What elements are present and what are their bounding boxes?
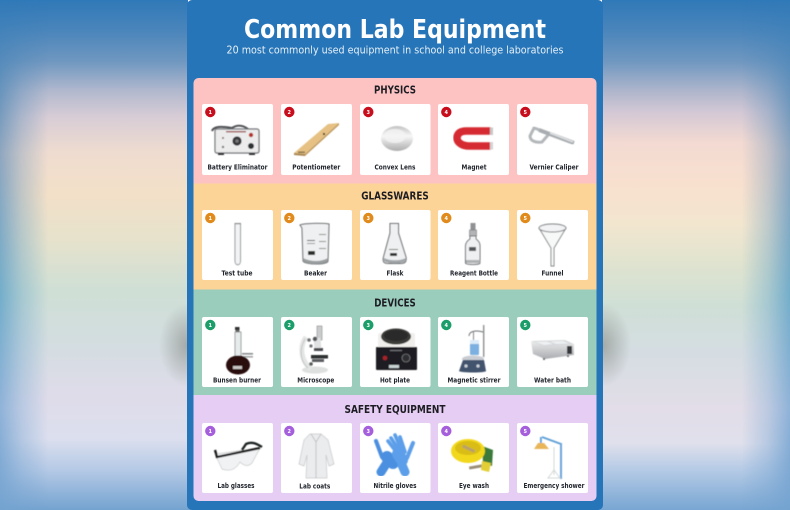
icon: convex lens [381, 126, 413, 151]
heading: devices: DEVICES [374, 296, 416, 310]
card: convex lens [360, 104, 430, 175]
icon: eye wash [451, 439, 493, 472]
card: microscope [281, 317, 352, 387]
content panel [194, 78, 596, 501]
badge 2: 2 [288, 110, 292, 116]
icon: lab coat [299, 434, 334, 478]
badge 2: 2 [288, 216, 292, 222]
icon: funnel [539, 224, 566, 266]
badge 1: 1 [209, 110, 213, 116]
card: reagent bottle [438, 210, 509, 280]
icon: vernier caliper [530, 128, 574, 143]
icon: magnet [457, 128, 493, 150]
label: Lab coats [299, 482, 330, 490]
icon: reagent bottle [466, 223, 480, 264]
label: Nitrile gloves [374, 481, 416, 490]
label: Battery Eliminator [208, 162, 268, 172]
card: hot plate [360, 317, 430, 387]
badge 4: 4 [445, 429, 449, 435]
badge 1: 1 [209, 429, 213, 435]
card: nitrile gloves [360, 423, 430, 493]
icon: bunsen burner [226, 327, 253, 374]
label: Emergency shower [524, 481, 585, 490]
badge 3: 3 [367, 429, 371, 435]
label: Water bath [534, 376, 571, 384]
heading: safety equipment: SAFETY EQUIPMENT [344, 403, 446, 416]
label: Convex Lens [374, 162, 416, 172]
label: Reagent Bottle [450, 268, 498, 278]
card: eye wash [438, 423, 509, 493]
card: funnel [517, 210, 588, 280]
card: battery eliminator [202, 104, 273, 175]
badge 2: 2 [288, 429, 292, 435]
label: Hot plate [380, 376, 410, 384]
icon: test tube [234, 223, 241, 265]
card: water bath [517, 317, 588, 387]
card: potentiometer [281, 104, 352, 175]
label: Magnetic stirrer [448, 376, 501, 384]
card: lab coats [281, 423, 352, 493]
badge 1: 1 [209, 323, 213, 329]
card: lab glasses [202, 423, 273, 493]
icon: magnetic stirrer [459, 325, 486, 372]
card: beaker [281, 210, 352, 280]
title: Common Lab Equipment [244, 15, 546, 45]
card: test tube [202, 210, 273, 280]
icon: potentiometer [294, 123, 339, 156]
icon: lab glasses [215, 443, 262, 470]
icon: battery eliminator [212, 126, 259, 155]
label: Microscope [297, 376, 334, 384]
icon: emergency shower [534, 437, 562, 479]
heading: physics: PHYSICS [374, 84, 416, 96]
card: magnetic stirrer [438, 317, 509, 387]
panel: devices [194, 290, 596, 395]
label: Vernier Caliper [530, 162, 579, 172]
badge 5: 5 [524, 323, 528, 329]
infographic poster [187, 0, 603, 510]
label: Funnel [542, 268, 564, 278]
badge 3: 3 [367, 216, 371, 222]
card: flask [360, 210, 430, 280]
badge 5: 5 [524, 429, 528, 435]
badge 3: 3 [367, 110, 371, 116]
card: emergency shower [517, 423, 588, 493]
label: Bunsen burner [213, 376, 261, 384]
panel: safety equipment [194, 395, 596, 501]
icon: hot plate [376, 328, 417, 370]
panel: physics [194, 78, 596, 184]
card: bunsen burner [202, 317, 273, 387]
badge 4: 4 [445, 110, 449, 116]
label: Potentiometer [292, 162, 341, 172]
badge 4: 4 [445, 216, 449, 222]
icon: water bath [531, 340, 574, 360]
badge 4: 4 [445, 323, 449, 329]
badge 1: 1 [209, 216, 213, 222]
card: vernier caliper [517, 104, 588, 175]
subtitle: 20 most commonly used equipment in school and college laboratories [226, 44, 564, 56]
panel: glasswares [194, 184, 596, 290]
card: magnet [438, 104, 509, 175]
label: Lab glasses [218, 481, 254, 490]
icon: microscope [301, 326, 328, 374]
label: Test tube [222, 268, 253, 278]
badge 3: 3 [367, 323, 371, 329]
label: Magnet [462, 162, 487, 172]
label: Flask [386, 268, 404, 278]
label: Eye wash [459, 481, 489, 490]
label: Beaker [304, 268, 327, 278]
icon: beaker [300, 223, 329, 264]
heading: glasswares: GLASSWARES [361, 190, 429, 202]
badge 5: 5 [524, 216, 528, 222]
badge 2: 2 [288, 323, 292, 329]
icon: nitrile gloves [376, 435, 413, 472]
icon: flask [383, 224, 406, 264]
badge 5: 5 [524, 110, 528, 116]
